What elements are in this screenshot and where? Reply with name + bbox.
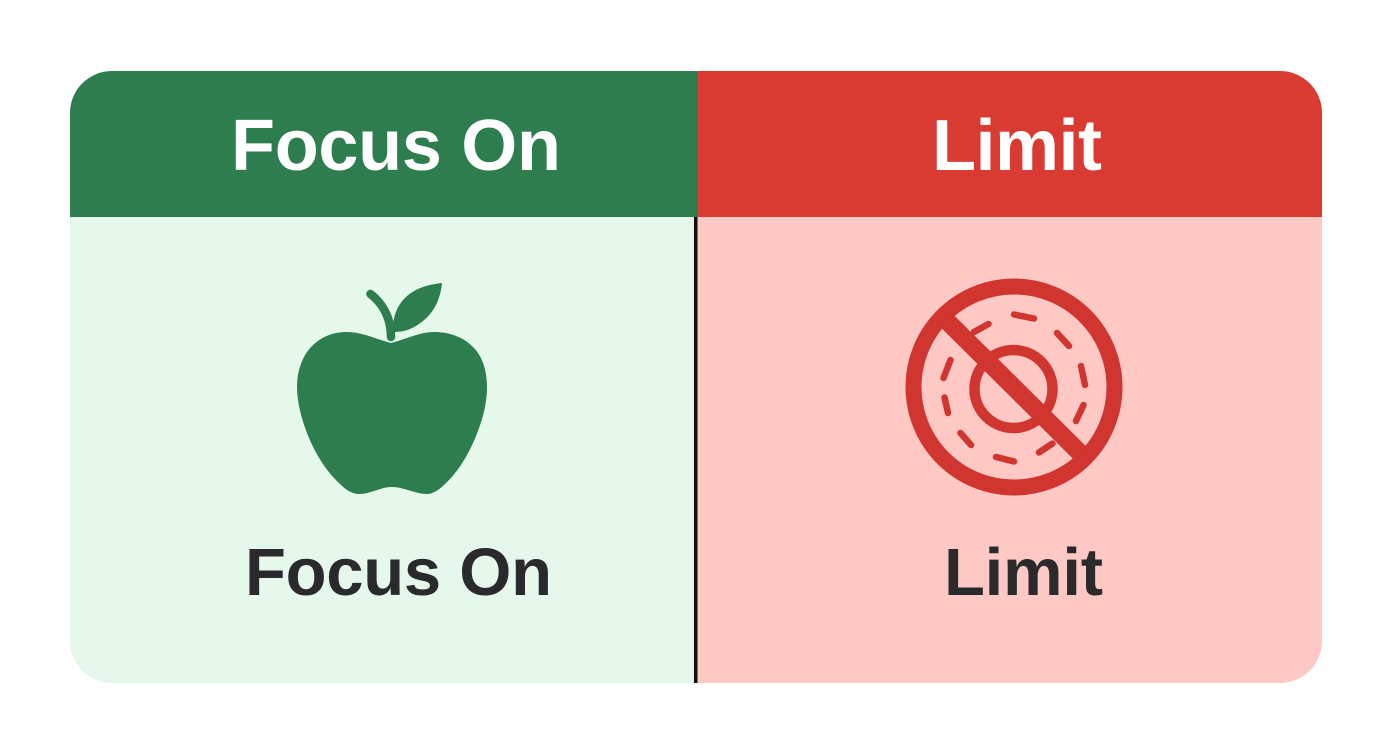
header: limit	[698, 71, 1322, 217]
donut sprinkle dashes	[944, 314, 1085, 462]
apple leaf	[393, 283, 442, 332]
panel: focus on body	[70, 217, 695, 683]
label: focus on: Focus On	[245, 535, 552, 610]
icon: prohibited donut	[914, 286, 1114, 488]
heading: limit header text: Limit	[932, 106, 1102, 186]
prohibition slash	[945, 319, 1083, 456]
panel: limit body	[695, 217, 1322, 683]
prohibition circle	[914, 286, 1114, 488]
apple body	[297, 332, 487, 494]
donut hole ring	[974, 350, 1052, 428]
apple stem	[370, 294, 391, 337]
heading: focus on header text: Focus On	[231, 106, 561, 186]
icon: green apple	[297, 283, 487, 494]
label: limit: Limit	[944, 535, 1103, 610]
header: focus on	[70, 71, 698, 217]
center divider line	[694, 217, 698, 683]
